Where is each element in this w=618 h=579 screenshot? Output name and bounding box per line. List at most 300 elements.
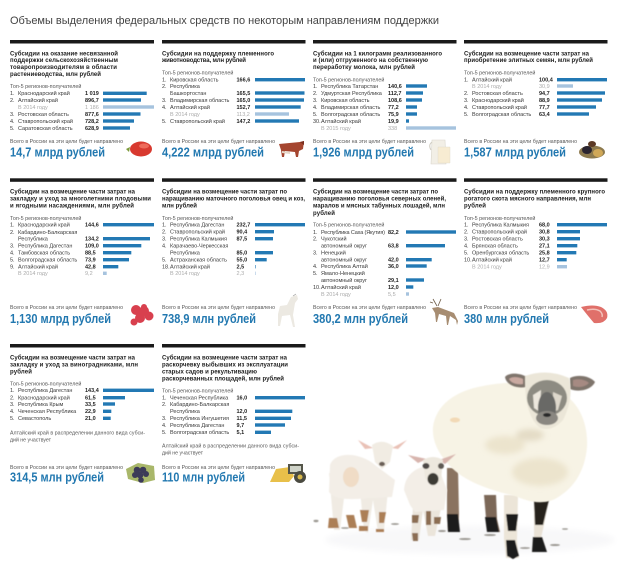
top-5 list: 2. [313, 237, 318, 243]
heading [161, 50, 274, 64]
top-5 list: 165,5 [236, 91, 250, 97]
top-5 list: 5,5 [388, 292, 396, 298]
top-5 list [464, 70, 554, 118]
top-5 list: Алтайский край [321, 118, 361, 125]
top-5 list: 77,2 [388, 105, 399, 111]
heading: Субсидии на возмещение части затрат на [10, 189, 136, 196]
total [313, 305, 426, 326]
top-5 list: 10. [313, 285, 321, 291]
top-5 list [464, 215, 550, 271]
heading: раскорчеванных площадей, млн рублей [162, 376, 284, 383]
top-5 list: 30,3 [539, 237, 550, 243]
top-5 list: Республика Дагестан [18, 388, 72, 394]
heading [162, 189, 305, 210]
top-5 list: 147,2 [236, 119, 250, 125]
top-5 list: 1. [10, 223, 15, 229]
sheep [433, 372, 595, 559]
top-5 list: 3. [10, 402, 15, 408]
icon: reindeer [430, 299, 458, 325]
top-5 list: 1. [464, 223, 469, 229]
sheep head [525, 372, 571, 429]
top-5 list: 877,6 [85, 112, 99, 118]
top-5 list: 30,9 [539, 84, 550, 90]
top-5 list [313, 77, 402, 132]
top-5 list [162, 215, 250, 277]
bar chart [255, 396, 305, 434]
top-5 list: 2. [464, 91, 469, 97]
total: Всего в России на эти цели будет направлено [10, 139, 123, 145]
top-5 list: Алтайский край [18, 97, 58, 104]
heading: и (или) отгруженного на собственную [313, 57, 428, 64]
top-5 list: 9. [10, 265, 15, 271]
heading: приобретение элитных семян, млн рублей [464, 57, 593, 64]
top-5 list: Волгоградская область [472, 112, 531, 118]
icon: pepper [126, 142, 152, 156]
heading: млн рублей [162, 203, 197, 210]
top-5 list: Алтайский край [472, 257, 512, 264]
top-5 list: 55,0 [236, 258, 247, 264]
top-5 list: 1. [10, 91, 15, 97]
total: Всего в России на эти цели будет направлено [162, 139, 275, 145]
top-5 list: 3. [10, 244, 15, 250]
lamb left [328, 440, 407, 533]
top-5 list: В 2014 году [321, 292, 351, 298]
note: Алтайский край в распределении данного вида субси- [162, 443, 299, 450]
note: дий не участвует [162, 450, 204, 457]
top-5 list: 896,7 [85, 98, 99, 104]
heading: рублей [464, 203, 486, 210]
title: Объемы выделения федеральных средств по некоторым направлениям поддержки [10, 15, 439, 27]
top-5 list: Топ-5 регионов-получателей [162, 215, 233, 222]
icon: grapes [126, 463, 155, 483]
top-5 list: Республика Калмыкия [472, 223, 529, 229]
total: 738,9 млн рублей [162, 312, 256, 326]
top-5 list: 22,9 [85, 409, 96, 415]
top-5 list: 140,6 [388, 84, 402, 90]
panel: плодовые насаждения [10, 178, 154, 326]
icon: bulldozer [270, 464, 306, 483]
top-5 list: Ставропольский край [170, 229, 225, 236]
top-5 list: 2. [313, 91, 318, 97]
total: 1,130 млрд рублей [10, 312, 111, 326]
total [464, 139, 577, 160]
heading: Субсидии на возмещение части затрат на [10, 355, 136, 362]
heading: животноводства, млн рублей [161, 57, 246, 64]
heading: наращиванию маточного поголовья овец и коз, [162, 197, 305, 203]
heading: наращиванию поголовья северных оленей, [313, 196, 446, 203]
top-5 list: 5. [10, 258, 15, 264]
photo: sheep with two lambs on snow [314, 372, 615, 559]
bar chart [103, 223, 154, 275]
top-5 list: Кабардино-Балкарская [18, 230, 77, 236]
top-5 list: 68,0 [539, 223, 550, 229]
top-5 list: Республика Алтай [321, 263, 368, 270]
heading [464, 189, 605, 210]
total: Всего в России на эти цели будет направлено [313, 139, 426, 145]
top-5 list: 3. [313, 98, 318, 104]
top-5 list: В 2014 году [170, 112, 200, 118]
top-5 list: Ставропольский край [472, 104, 527, 111]
top-5 list: Топ-5 регионов-получателей [10, 380, 81, 387]
top-5 list: 2. [10, 230, 15, 236]
heading [10, 355, 138, 376]
top-5 list: 5. [313, 271, 318, 277]
top-5 list: Топ-5 регионов-получателей [162, 388, 233, 395]
top-5 list: Чукотский [321, 236, 347, 243]
note: дий не участвует [10, 436, 52, 443]
top-5 list: 232,7 [236, 223, 250, 229]
top-5 list: 94,7 [539, 91, 550, 97]
top-5 list: Кабардино-Балкарская [170, 402, 229, 408]
total: Всего в России на эти цели будет направлено [464, 139, 577, 145]
top-5 list: 42,0 [388, 258, 399, 264]
top-5 list: Топ-5 регионов-получателей [464, 215, 535, 222]
note [10, 429, 145, 443]
top-5 list: Ставропольский край [18, 118, 73, 125]
top-5 list: 11,5 [236, 416, 247, 422]
top-5 list: 4. [10, 119, 15, 125]
top-5 list: 30. [313, 119, 321, 125]
heading: переработку молока, млн рублей [313, 64, 415, 71]
total: Всего в России на эти цели будет направлено [464, 305, 577, 311]
heading: Субсидии на возмещение части затрат по [313, 189, 438, 196]
panel: маточное поголовье овец и коз [162, 178, 306, 327]
heading: закладку и уход за виноградниками, млн [10, 363, 138, 369]
top-5 list: 9,7 [236, 423, 244, 429]
lamb right [404, 454, 456, 541]
panel: виноградники [10, 344, 155, 484]
total: 380,2 млн рублей [313, 312, 408, 326]
top-5 list: Алтайский край [321, 284, 361, 291]
top-5 list: 1. [313, 230, 318, 236]
top-5 list: 4. [162, 244, 167, 250]
top-5 list: 143,4 [85, 388, 100, 394]
top-5 list: 108,6 [388, 98, 402, 104]
top-5 list: 5. [162, 119, 167, 125]
heading [313, 189, 446, 217]
icon: cow [279, 141, 304, 157]
panel: племенное животноводство [161, 40, 306, 160]
top-5 list: 5. [313, 112, 318, 118]
top-5 list: автономный округ [321, 277, 367, 284]
sheep body [433, 383, 587, 502]
total: 4,222 млрд рублей [162, 146, 264, 160]
heading: Субсидии на поддержку племенного [162, 50, 274, 58]
heading: рублей [10, 369, 32, 376]
total [10, 465, 123, 484]
top-5 list: Владимирская область [170, 98, 229, 104]
top-5 list: 144,6 [85, 223, 99, 229]
top-5 list: Волгоградская область [321, 112, 380, 118]
total: 1,587 млрд рублей [464, 146, 566, 160]
top-5 list: 5. [162, 430, 167, 436]
top-5 list: 33,5 [85, 402, 96, 408]
top-5 list: 2. [464, 230, 469, 236]
total: 380 млн рублей [464, 312, 549, 326]
total: 1,926 млрд рублей [313, 146, 414, 160]
bar chart [255, 78, 305, 123]
top-5 list: В 2014 году [170, 271, 200, 277]
top-5 list: Алтайский край [170, 264, 210, 271]
top-5 list: 88,9 [539, 98, 550, 104]
top-5 list: Республика Дагестан [170, 223, 224, 229]
top-5 list: 166,6 [236, 78, 250, 84]
top-5 list: Республика [170, 409, 201, 415]
top-5 list: 2. [10, 396, 15, 402]
heading: поддержки сельскохозяйственным [10, 57, 119, 64]
top-5 list: Краснодарский край [18, 395, 70, 402]
total [313, 139, 426, 160]
icon: seeds [579, 141, 605, 158]
top-5 list: Ростовская область [472, 237, 523, 243]
top-5 list: Севастополь [18, 416, 51, 422]
top-5 list: 1. [313, 84, 318, 90]
top-5 list [313, 222, 399, 298]
top-5 list: 5. [464, 112, 469, 118]
top-5 list: Топ-5 регионов-получателей [313, 77, 384, 84]
top-5 list: 3. [464, 237, 469, 243]
top-5 list: Краснодарский край [18, 222, 70, 229]
heading: Субсидии на возмещение части затрат на [464, 50, 590, 58]
heading: и ягодными насаждениями, млн рублей [10, 203, 134, 210]
top-5 list: В 2015 году [321, 126, 351, 132]
top-5 list: 4. [313, 105, 318, 111]
top-5 list: 82,2 [388, 230, 399, 236]
top-5 list: Чеченская Республика [18, 409, 77, 415]
top-5 list: 63,4 [539, 112, 551, 118]
bar chart [255, 223, 305, 275]
heading: раскорчевку выбывших из эксплуатации [162, 362, 288, 369]
total: Всего в России на эти цели будет направлено [162, 305, 275, 311]
top-5 list: 1. [162, 396, 167, 402]
top-5 list: Саратовская область [18, 126, 73, 132]
top-5 list: Республика Дагестан [18, 244, 72, 250]
heading [313, 50, 442, 71]
top-5 list: 4. [10, 251, 15, 257]
snow ground [314, 520, 615, 554]
top-5 list: 100,4 [539, 78, 554, 84]
top-5 list: В 2014 году [472, 265, 502, 271]
top-5 list: 90,4 [236, 230, 248, 236]
top-5 list: 4. [10, 409, 15, 415]
top-5 list: Топ-5 регионов-получателей [10, 215, 81, 222]
top-5 list: Чеченская Республика [170, 396, 229, 402]
total: 14,7 млрд рублей [10, 146, 105, 160]
top-5 list: 165,0 [236, 98, 250, 104]
heading: маралов и мясных табунных лошадей, млн [313, 203, 445, 210]
heading: Субсидии на оказание несвязанной [10, 50, 118, 58]
sheep legs [447, 468, 549, 559]
heading: рогатого скота мясного направления, млн [464, 197, 591, 203]
top-5 list: 1. [162, 78, 167, 84]
top-5 list: Владимирская область [321, 105, 380, 111]
top-5 list: 5. [10, 126, 15, 132]
top-5 list: 5. [464, 251, 469, 257]
heading [10, 189, 151, 210]
top-5 list: 87,5 [236, 237, 247, 243]
top-5 list: Алтайский край [18, 264, 58, 271]
heading: товаропроизводителям в области [10, 64, 117, 71]
top-5 list: 12,0 [388, 285, 399, 291]
top-5 list: Алтайский край [472, 77, 512, 84]
top-5 list: Топ-5 регионов-получателей [464, 70, 535, 76]
top-5 list: 1. [464, 78, 469, 84]
top-5 list: 113,2 [236, 112, 250, 118]
total [162, 465, 275, 484]
bar chart [557, 223, 607, 268]
top-5 list: 3. [10, 112, 15, 118]
top-5 list: Республика Крым [18, 402, 64, 408]
top-5 list: 75,9 [388, 112, 399, 118]
total: Всего в России на эти цели будет направлено [10, 465, 123, 471]
top-5 list: 18. [162, 265, 170, 271]
heading [10, 50, 119, 78]
top-5 list: Краснодарский край [18, 90, 70, 97]
top-5 list: 21,0 [85, 416, 96, 422]
top-5 list: 109,0 [85, 244, 99, 250]
top-5 list: 628,9 [85, 126, 99, 132]
top-5 list: 12,9 [539, 265, 550, 271]
top-5 list: 5,1 [236, 430, 244, 436]
top-5 list: Республика [170, 84, 201, 90]
heading: Субсидии на 1 килограмм реализованного [313, 50, 442, 58]
top-5 list: 42,8 [85, 265, 96, 271]
top-5 list: 3. [313, 251, 318, 257]
panel: молоко [313, 40, 456, 164]
total: Всего в России на эти цели будет направлено [10, 305, 123, 311]
top-5 list: Республика Татарстан [321, 84, 378, 90]
bar chart [406, 230, 456, 296]
top-5 list: Ставропольский край [170, 118, 225, 125]
top-5 list: 85,0 [236, 251, 247, 257]
top-5 list: Волгоградская область [170, 430, 229, 436]
total: Всего в России на эти цели будет направлено [162, 465, 275, 471]
top-5 list: Кировская область [170, 78, 219, 84]
top-5 list [162, 388, 247, 436]
top-5 list: 63,8 [388, 244, 399, 250]
top-5 list: Республика [170, 251, 201, 257]
bar chart [557, 78, 607, 116]
top-5 list [10, 215, 99, 277]
top-5 list: 2. [162, 230, 167, 236]
top-5 list: Карачаево-Черкесская [170, 244, 228, 250]
top-5 list: 2. [10, 98, 15, 104]
top-5 list: Оренбургская область [472, 251, 529, 257]
top-5 list: 3. [162, 237, 167, 243]
top-5 list: 25,8 [539, 251, 550, 257]
top-5 list: Астраханская область [170, 258, 227, 264]
top-5 list: 4. [464, 244, 469, 250]
top-5 list: 1 019 [85, 91, 99, 97]
panel: несвязанная поддержка растениеводства [10, 40, 154, 160]
top-5 list: 112,7 [388, 91, 401, 97]
total [10, 139, 123, 160]
top-5 list: В 2014 году [18, 271, 48, 277]
top-5 list: Топ-5 регионов-получателей [162, 70, 233, 76]
panel: элитные семена [464, 40, 608, 160]
bar chart [103, 92, 154, 130]
top-5 list: 4. [162, 105, 167, 111]
heading: Субсидии на возмещение части затрат на [162, 355, 288, 362]
top-5 list: Волгоградская область [18, 258, 77, 264]
top-5 list: Республика Ингушетия [170, 416, 229, 422]
top-5 list: Республика Калмыкия [170, 237, 227, 243]
note: Алтайский край в распределении данного вида субси- [10, 429, 145, 436]
heading: закладку и уход за многолетними плодовыми [10, 197, 151, 203]
total: Всего в России на эти цели будет направлено [313, 305, 426, 311]
top-5 list [10, 380, 100, 422]
top-5 list: Ростовская область [472, 91, 523, 97]
icon: meat [581, 306, 607, 323]
top-5 list: 1. [162, 223, 167, 229]
top-5 list: 728,2 [85, 119, 99, 125]
bar chart [406, 84, 456, 130]
total [162, 139, 275, 160]
note [162, 443, 299, 457]
top-5 list: 29,1 [388, 278, 399, 284]
heading: старых садов и рекультивацию [162, 370, 257, 376]
top-5 list: 2. [162, 84, 167, 90]
top-5 list: Тамбовская область [18, 251, 70, 257]
top-5 list [10, 83, 99, 132]
top-5 list: Топ-5 регионов-получателей [313, 222, 384, 229]
top-5 list: Ненецкий [321, 250, 346, 257]
top-5 list: 10. [464, 258, 472, 264]
top-5 list: 73,9 [85, 258, 96, 264]
panel: раскорчевка садов [162, 344, 306, 484]
top-5 list: 1 186 [85, 105, 99, 111]
top-5 list: 2,3 [236, 271, 244, 277]
top-5 list: 4. [162, 423, 167, 429]
top-5 list: Брянская область [472, 244, 518, 250]
heading: Субсидии на возмещение части затрат по [162, 189, 287, 196]
top-5 list: 30,8 [539, 230, 550, 236]
heading: рублей [313, 210, 335, 217]
top-5 list: Башкортостан [170, 91, 206, 97]
top-5 list: Ростовская область [18, 112, 69, 118]
top-5 list: 2. [162, 402, 167, 408]
top-5 list: автономный округ [321, 243, 367, 250]
icon: goat [278, 294, 298, 327]
bar chart [103, 389, 154, 420]
top-5 list: Алтайский край [170, 104, 210, 111]
top-5 list: 61,5 [85, 396, 96, 402]
top-5 list: автономный округ [321, 257, 367, 264]
top-5 list: Кировская область [321, 98, 370, 104]
top-5 list: 12,0 [236, 409, 247, 415]
total: 314,5 млн рублей [10, 470, 104, 484]
icon: milk jug and glass [430, 140, 450, 164]
heading [464, 50, 593, 64]
top-5 list: 77,7 [539, 105, 550, 111]
top-5 list: 3. [162, 416, 167, 422]
top-5 list: 16,0 [236, 396, 247, 402]
total: 110 млн рублей [162, 470, 245, 484]
top-5 list: 3. [464, 98, 469, 104]
top-5 list: Республика Дагестан [170, 423, 224, 429]
top-5 list: 5. [162, 258, 167, 264]
top-5 list [162, 70, 250, 125]
total [10, 305, 123, 326]
top-5 list: В 2014 году [472, 84, 502, 90]
top-5 list: 134,2 [85, 237, 99, 243]
top-5 list: 36,0 [388, 264, 399, 270]
top-5 list: 2,5 [236, 265, 244, 271]
top-5 list: Ямало-Ненецкий [321, 270, 365, 277]
top-5 list: Республика [18, 237, 49, 243]
top-5 list: Краснодарский край [472, 97, 524, 104]
top-5 list: 88,5 [85, 251, 96, 257]
